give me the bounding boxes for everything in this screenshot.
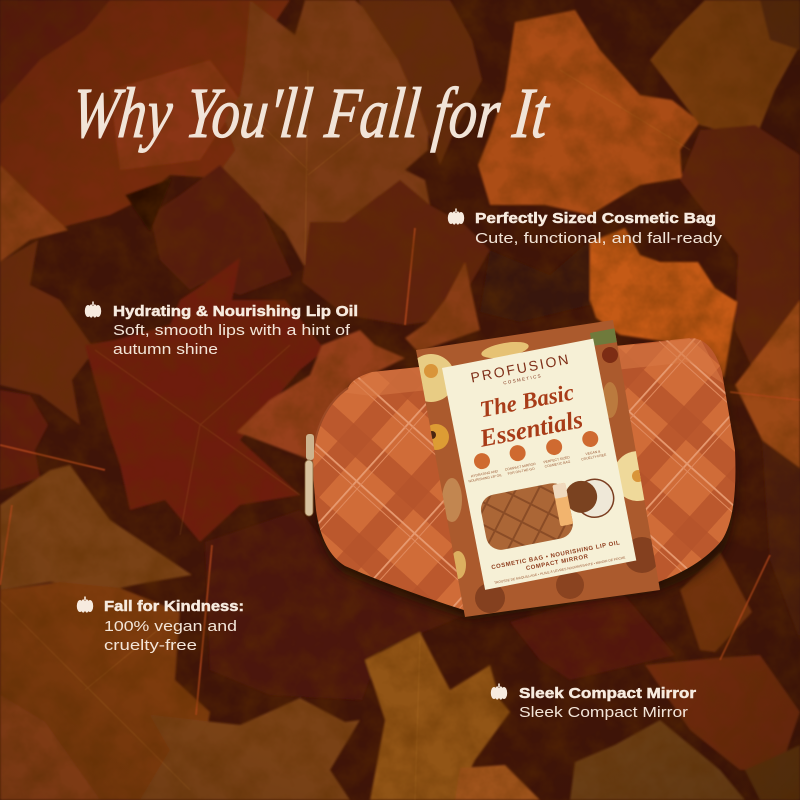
callout heading: Sleek Compact Mirror	[519, 685, 696, 702]
cream front panel	[442, 339, 636, 590]
callout body: Cute, functional, and fall-ready	[475, 230, 723, 247]
contents list: COSMETIC BAG • NOURISHING LIP OIL	[491, 540, 621, 571]
callout: lip oil	[85, 302, 358, 358]
callout body: Soft, smooth lips with a hint of	[113, 322, 351, 339]
callout body: 100% vegan and	[104, 618, 237, 635]
callout body line two: cruelty-free	[104, 637, 197, 654]
leaf stems	[0, 228, 800, 715]
cosmetic bag	[300, 330, 750, 630]
title: Why You'll Fall for It	[68, 73, 554, 153]
feature labels: HYDRATING AND	[471, 469, 499, 478]
feature labels: COMPACT MIRROR	[505, 462, 537, 472]
pack title line two: Essentials	[477, 406, 585, 453]
callout body: Sleek Compact Mirror	[519, 704, 688, 721]
callout body line two: autumn shine	[113, 341, 218, 358]
icon: pumpkin	[448, 208, 464, 225]
icon: pumpkin	[491, 684, 507, 700]
callout heading: Fall for Kindness:	[104, 598, 244, 615]
callout: kindness	[77, 596, 244, 654]
floral decoration	[407, 328, 663, 613]
feature labels: VEGAN &	[585, 449, 601, 456]
feature labels: COSMETIC BAG	[544, 460, 571, 469]
brand name: PROFUSION	[469, 351, 572, 386]
icon: pumpkin	[77, 596, 93, 613]
callout: compact mirror	[491, 684, 696, 721]
feature labels	[467, 448, 607, 483]
callout heading: Hydrating & Nourishing Lip Oil	[113, 303, 358, 320]
product sleeve	[407, 320, 663, 617]
bag zipper	[305, 388, 348, 516]
pack title: The Basic	[478, 380, 576, 422]
contents list line two: COMPACT MIRROR	[526, 554, 589, 572]
feature labels: NOURISHING LIP OIL	[468, 473, 503, 483]
contents translation: TROUSSE DE MAQUILLAGE • HUILE À LÈVRES NOURRISSANTE • MIROIR DE POCHE	[494, 554, 627, 585]
callout: cosmetic bag	[448, 208, 723, 247]
product photo	[478, 472, 620, 552]
icon: pumpkin	[85, 302, 101, 318]
feature labels: FOR ON-THE-GO	[507, 467, 535, 476]
feature icons	[472, 430, 600, 470]
callout heading: Perfectly Sized Cosmetic Bag	[475, 210, 716, 227]
brand subline: COSMETICS	[503, 373, 542, 386]
feature labels: CRUELTY-FREE	[581, 453, 607, 462]
feature labels: PERFECT SIZED	[543, 455, 571, 464]
leaf veins	[0, 70, 690, 800]
